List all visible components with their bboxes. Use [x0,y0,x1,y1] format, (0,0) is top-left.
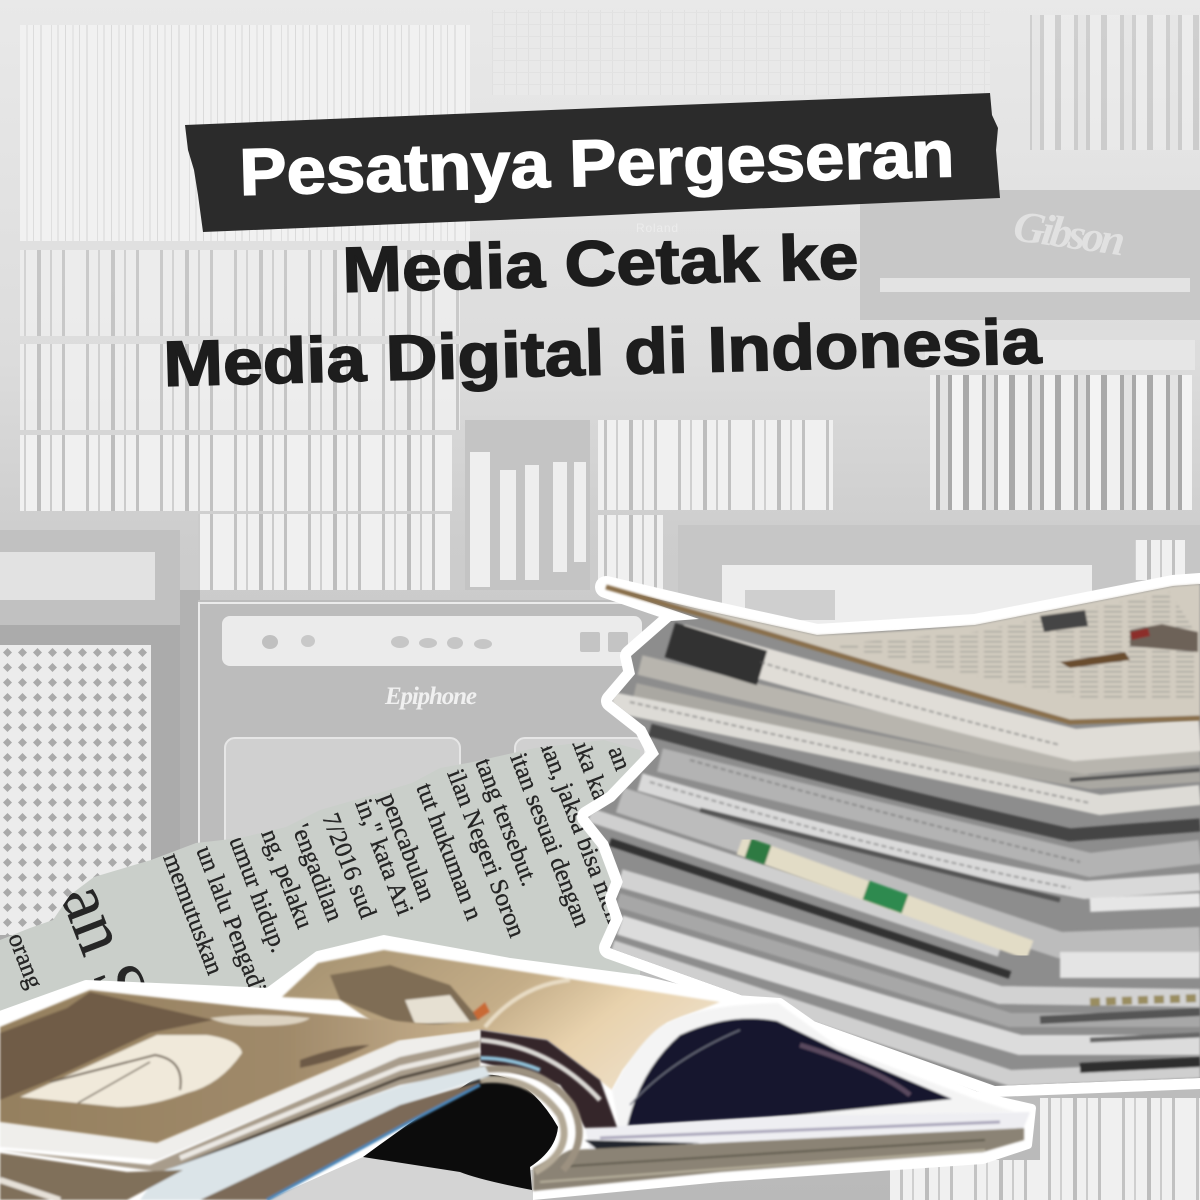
shelf rows in the centre and right [465,10,1200,1200]
clipping text: uka ka [565,732,614,804]
clipping text: memutuskan [157,849,229,979]
magazine bottom page edges [533,1112,1030,1191]
clipping text: in," kata Ari [349,795,418,919]
amplifier left [0,530,180,955]
clipping text: an S [45,872,165,1018]
clipping text: umur hidup. [223,832,292,956]
left page with interior photo [0,990,480,1143]
amplifier centre [180,590,668,1002]
title line 2: Media Cetak ke [341,221,859,306]
small newspaper print lines [630,662,1090,888]
clipping text: 7/2016 sud [316,809,381,923]
title line 1: Pesatnya Pergeseran [238,116,955,209]
dark right page [612,1003,1015,1132]
open magazine photo [0,939,1032,1200]
title line 3: Media Digital di Indonesia [162,305,1043,400]
clipping text: aan, jaksa bisa mem [533,735,631,934]
clipping text: ng, pelaku [255,825,318,933]
clipping text [2,732,636,1026]
dark band between folded pages [480,1030,617,1128]
clipping text: orang [2,929,48,993]
clipping text: un lalu Pengadilan [190,842,282,1026]
back right page with photo [282,950,720,1090]
black gap under page curl [363,1075,558,1190]
title tape: black torn strip [185,93,1000,232]
stack sheets [580,580,1200,1090]
left page stacked edges [0,1030,490,1200]
clipping text: ilan Negeri Soron [441,765,530,942]
amplifier right [678,525,1200,625]
amplifier brand labels: Roland [636,221,678,235]
clipping text: 'engadilan [286,820,348,926]
amplifier brand labels: Gibson [1011,201,1128,265]
shelf rows on the left [20,25,470,590]
top newspaper sheet [606,584,1200,722]
stack white sticker outline [588,584,1200,1086]
amplifier centre: Epiphone [384,683,477,710]
clipping text: tang tersebut. [469,754,543,890]
clipping text: pencabulan [374,789,441,906]
newspaper stack photo [580,580,1200,1090]
magazine white sticker outline [0,939,1032,1200]
clipping text: an [602,742,636,775]
curled page rings around gap [480,1040,600,1172]
cream folded newspaper with green marks [740,845,1030,950]
shadowed floor under magazine curl [267,1157,533,1200]
torn newspaper clipping [0,742,640,1010]
clipping text: itan sesuai dengan [504,749,595,931]
amplifier brand labels [636,201,1128,265]
clipping text: tut hukuman n [410,779,488,924]
